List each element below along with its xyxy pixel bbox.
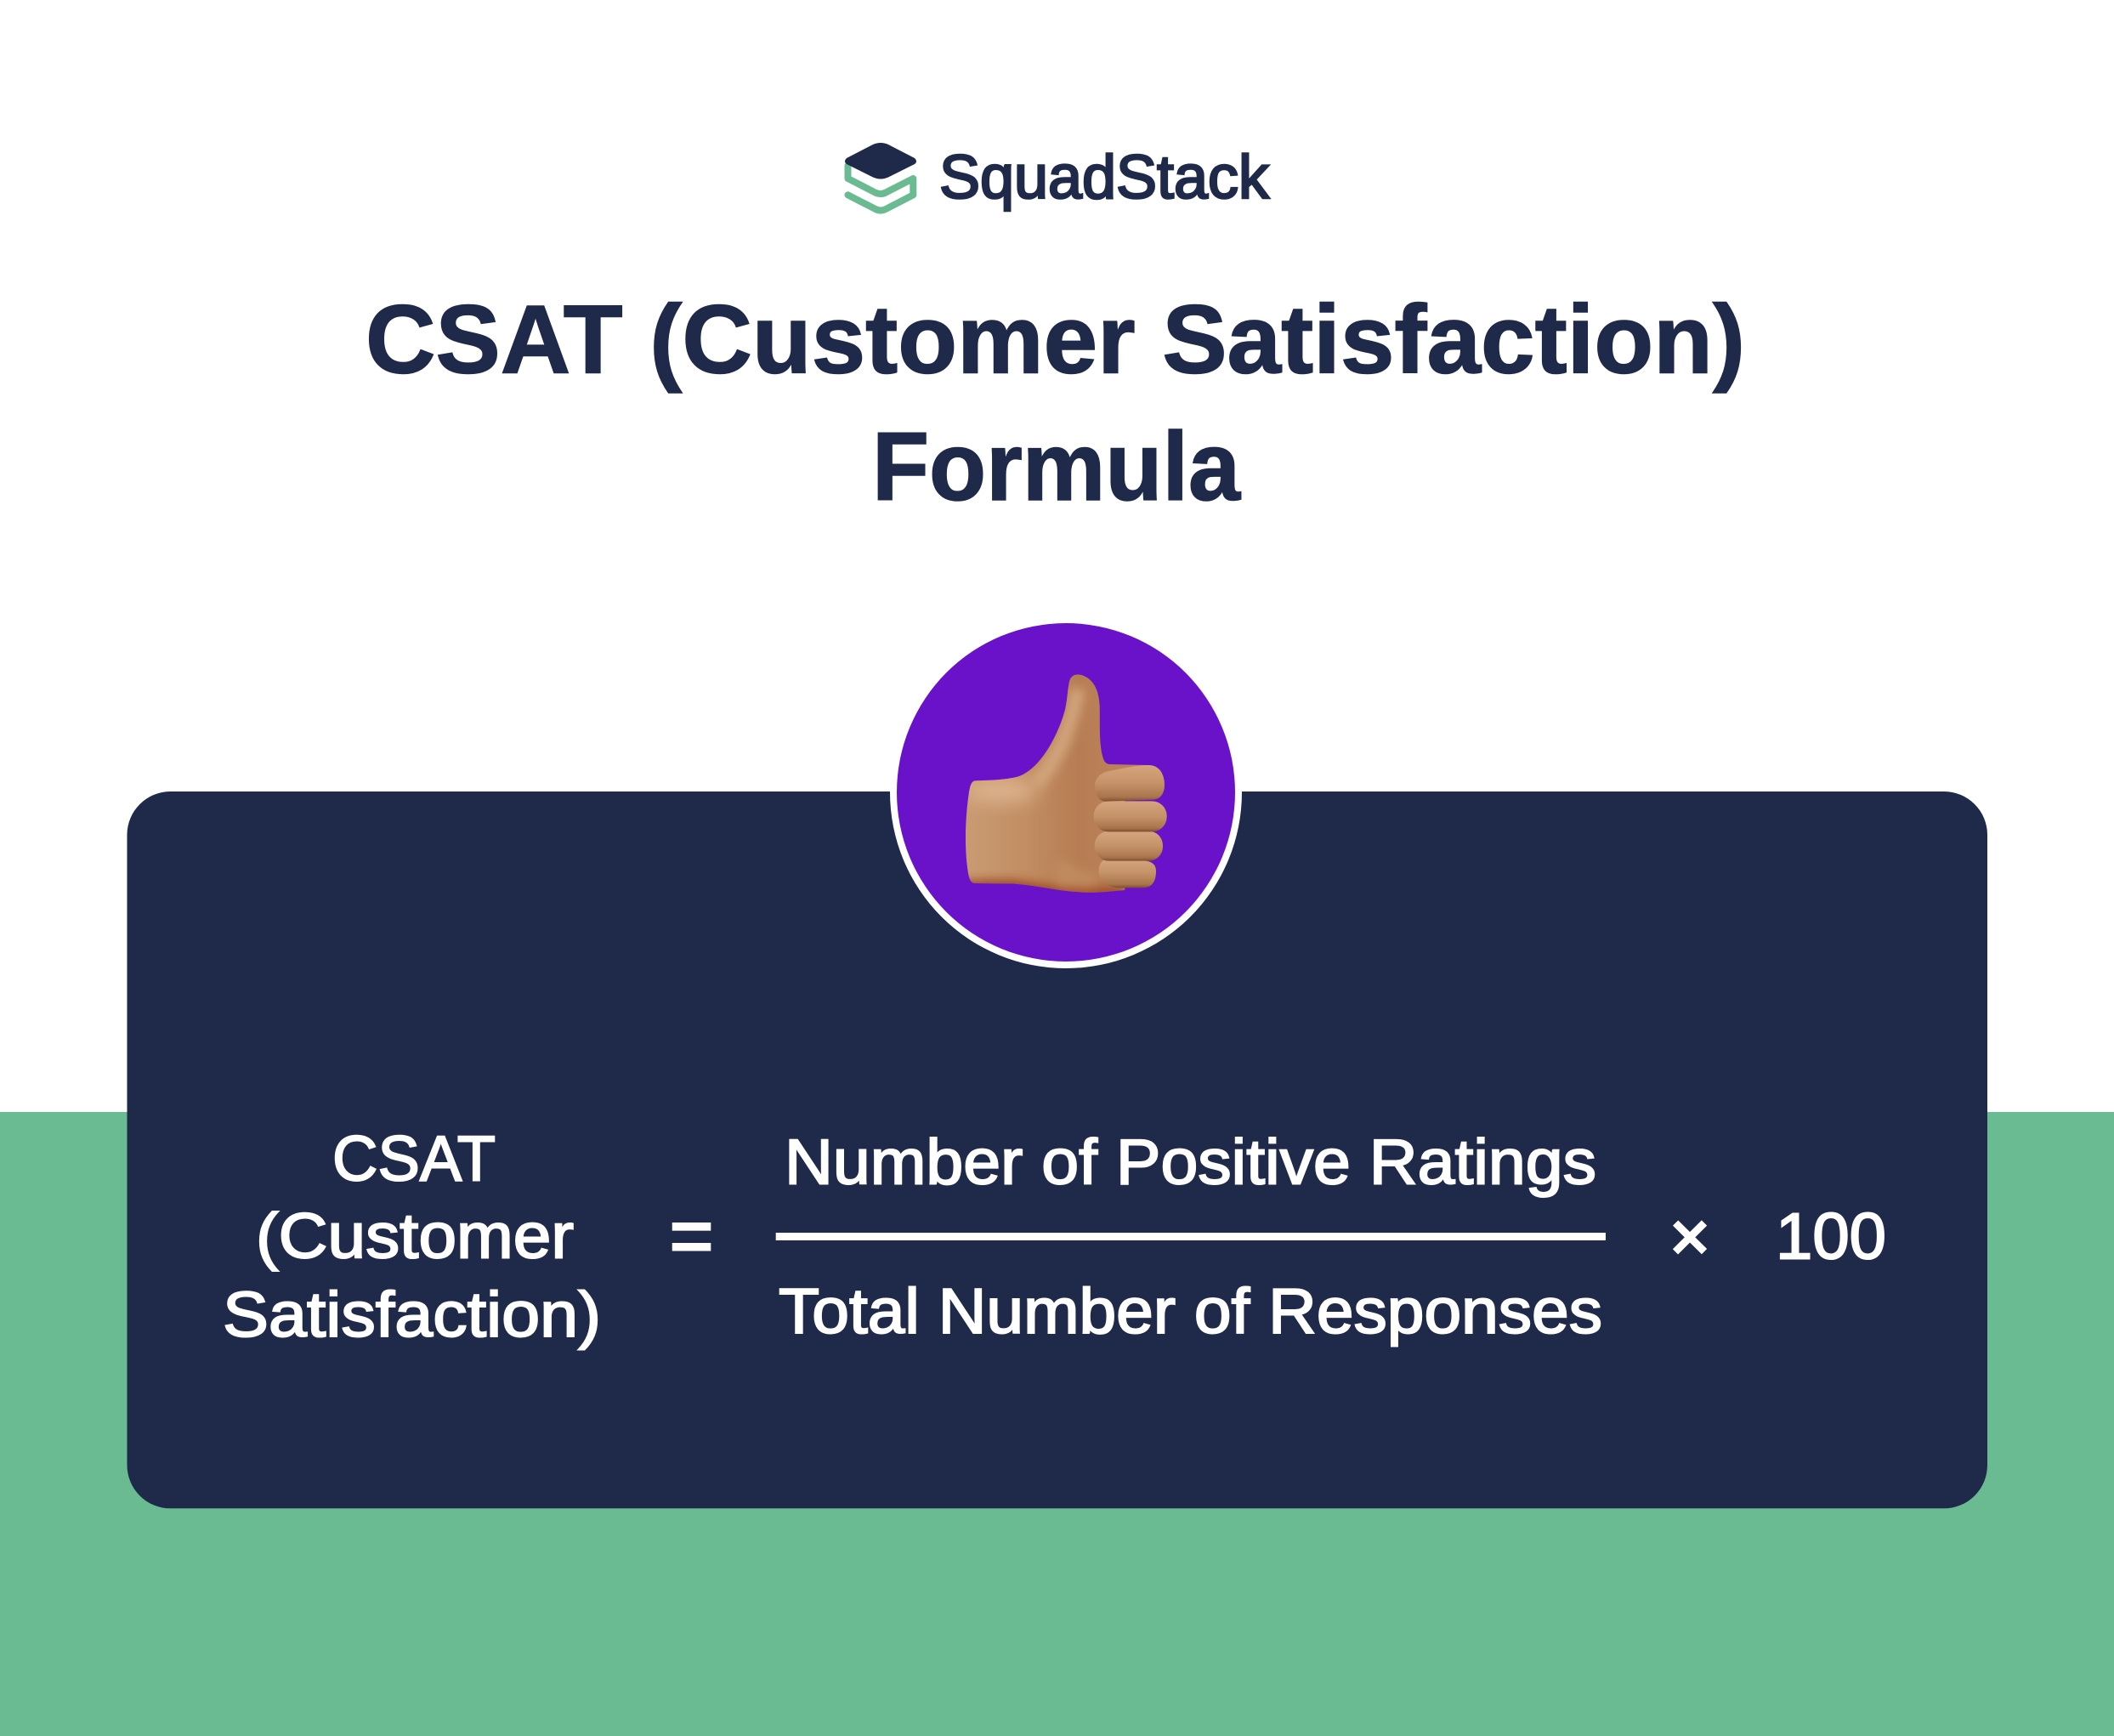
title line 1: CSAT (Customer Satisfaction) [366,286,1745,394]
left label: CSAT (Customer Satisfaction): Satisfaction) [223,1279,601,1350]
title line 2: Formula [872,413,1242,521]
icon: stacked layers [845,143,916,211]
purple disc [897,623,1235,962]
left label: CSAT (Customer Satisfaction) [223,1123,601,1350]
badge: thumbs up circle [890,616,1242,968]
left label: CSAT (Customer Satisfaction): CSAT [332,1123,496,1194]
wordmark: SquadStack [939,144,1270,212]
fingers [1094,765,1167,888]
title [366,286,1745,521]
panel: formula card [128,791,1987,1508]
icon: thumbs up hand [963,674,1167,899]
white ring [890,616,1242,968]
green background band [0,1112,2114,1736]
formula [223,1123,1886,1350]
numerator: Number of Positive Ratings [785,1126,1596,1198]
value: 100: 100 [1776,1200,1886,1274]
denominator: Total Number of Responses [779,1275,1602,1347]
fraction [776,1126,1606,1347]
equals sign: = [669,1194,714,1278]
multiply sign: × [1669,1199,1710,1274]
left label: CSAT (Customer Satisfaction): (Customer [256,1200,574,1271]
logo: SquadStack [845,143,1270,212]
fraction bar [776,1233,1606,1240]
